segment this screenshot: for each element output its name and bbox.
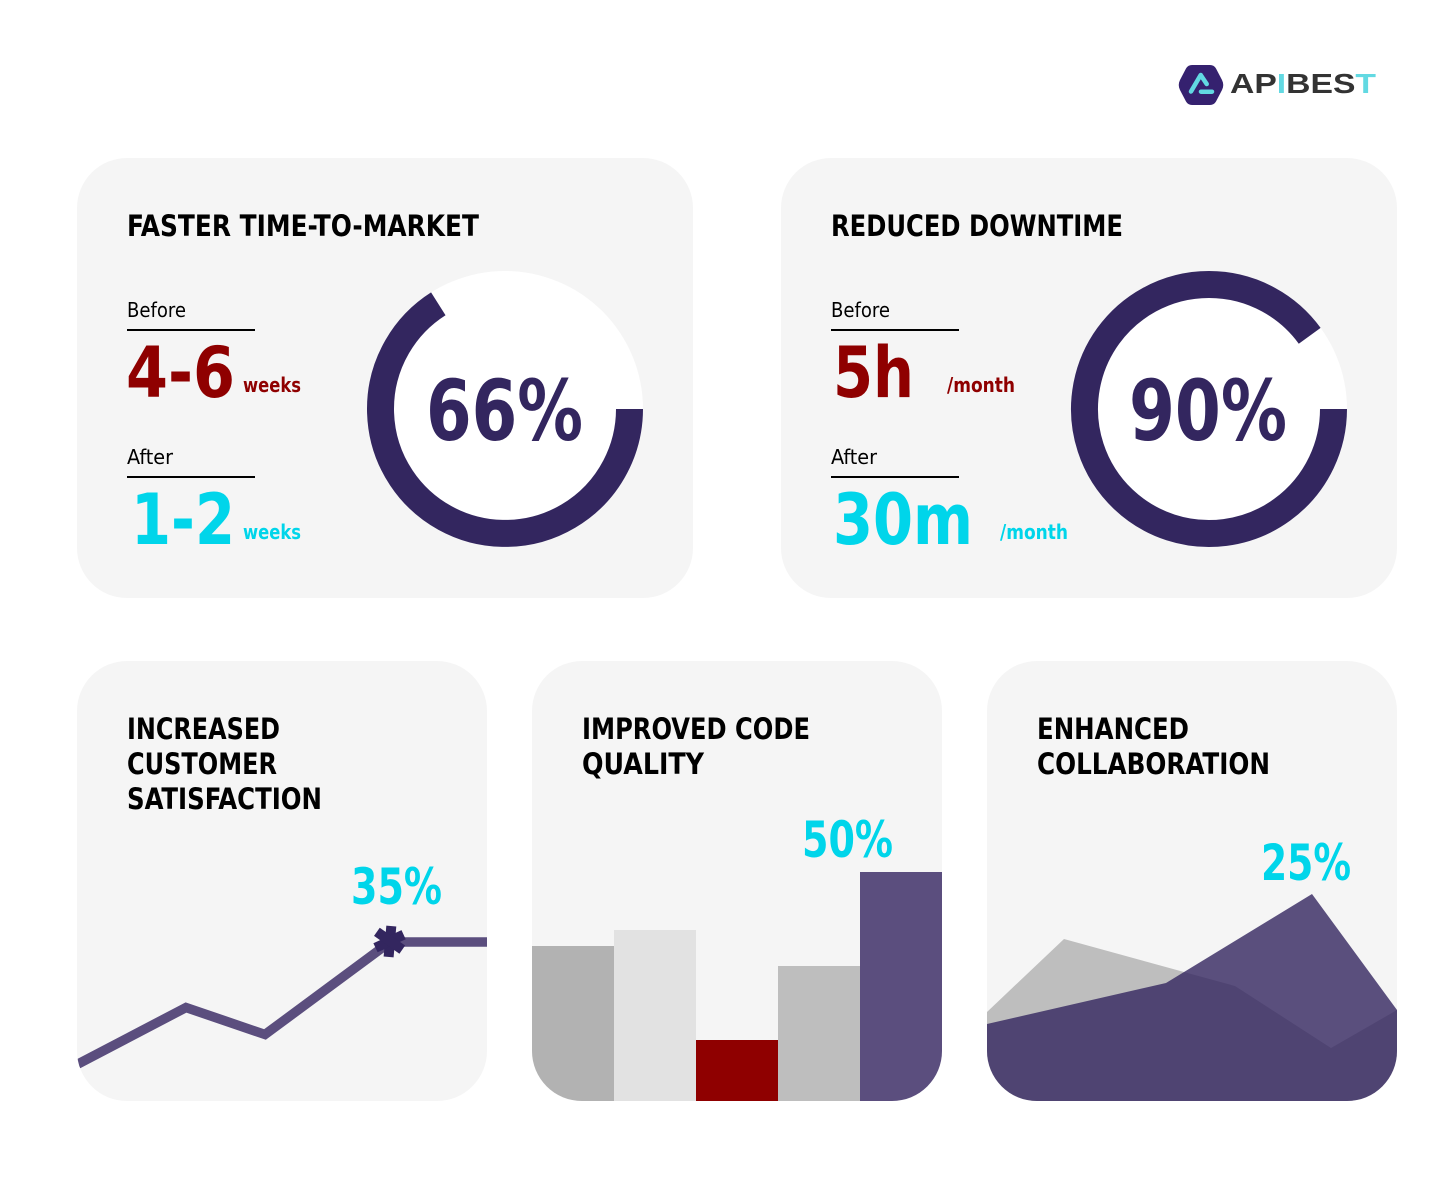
donut chart: 90% [1071,271,1347,547]
area chart [987,894,1397,1101]
panel: reduced downtime [781,158,1397,598]
heading [582,712,810,781]
before unit: weeks [243,373,301,397]
heading: IMPROVED CODE [582,712,810,746]
after label: After [127,445,174,469]
before label: Before [831,298,890,322]
donut chart: 66%: 66% [426,362,583,460]
heading: CUSTOMER [127,747,277,781]
logo wordmark: AP IBES T [1230,68,1376,99]
before unit: /month [947,373,1015,397]
heading [127,712,322,816]
bar chart [532,872,942,1101]
after label: After [831,445,878,469]
icon: asterisk marker [375,926,404,957]
value: 50%: 50% [802,811,893,869]
icon: logo hexagon [1179,65,1223,105]
before value: 5h [833,332,914,414]
heading: INCREASED [127,712,280,746]
after value: 1-2 [131,479,235,561]
heading: FASTER TIME-TO-MARKET [127,209,479,243]
after unit: /month [1000,520,1068,544]
heading: SATISFACTION [127,782,322,816]
after value: 30m [833,479,973,561]
panel: faster time-to-market [77,158,693,598]
before value: 4-6 [126,332,235,414]
donut chart: 66% [367,271,643,547]
logo [1179,65,1376,105]
heading: QUALITY [582,747,705,781]
panel: improved code quality [532,661,942,1101]
heading: ENHANCED [1037,712,1189,746]
value: 25%: 25% [1261,834,1351,892]
panel: increased customer satisfaction [77,661,487,1101]
donut chart: 90%: 90% [1129,362,1287,460]
heading [1037,712,1270,781]
before label: Before [127,298,186,322]
panel: enhanced collaboration [987,661,1397,1101]
line chart [78,926,487,1064]
value: 35%: 35% [351,858,442,916]
heading: COLLABORATION [1037,747,1270,781]
after unit: weeks [243,520,301,544]
heading: REDUCED DOWNTIME [831,209,1123,243]
